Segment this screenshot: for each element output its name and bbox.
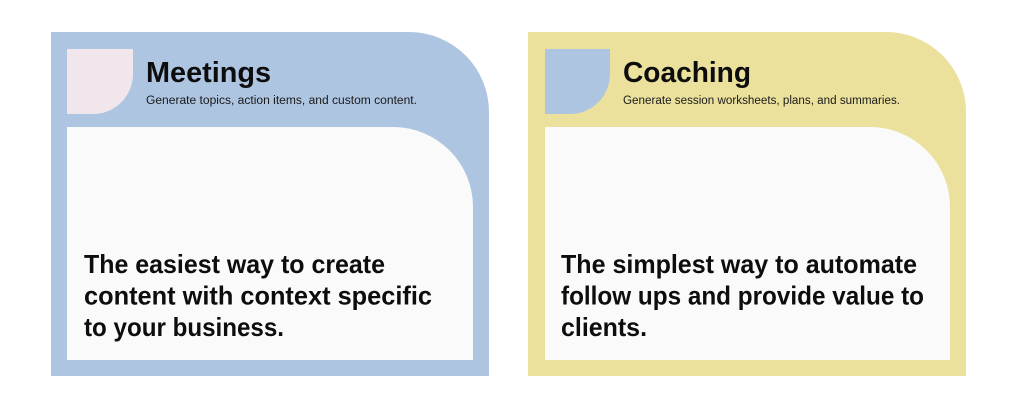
text: meetings subtitle: Generate topics, action items, and custom content.	[146, 95, 417, 107]
text: meetings statement: content with context specific	[84, 280, 432, 310]
icon: meetings placeholder tile	[67, 49, 133, 114]
text: meetings statement	[84, 249, 432, 342]
panel: coaching	[528, 32, 966, 376]
heading: coaching: Coaching	[623, 57, 751, 89]
heading: meetings: Meetings	[146, 57, 271, 89]
panel: meetings	[51, 32, 489, 376]
text: coaching statement: clients.	[561, 312, 647, 342]
card: coaching content	[545, 127, 950, 360]
card: meetings content	[67, 127, 473, 360]
text: coaching statement: follow ups and provide value to	[561, 280, 924, 310]
text: meetings statement: The easiest way to create	[84, 249, 385, 279]
text: coaching subtitle: Generate session worksheets, plans, and summaries.	[623, 95, 900, 107]
icon: coaching placeholder tile	[545, 49, 610, 114]
text: coaching statement	[561, 249, 924, 342]
text: meetings statement: to your business.	[84, 312, 284, 342]
text: coaching statement: The simplest way to automate	[561, 249, 917, 279]
